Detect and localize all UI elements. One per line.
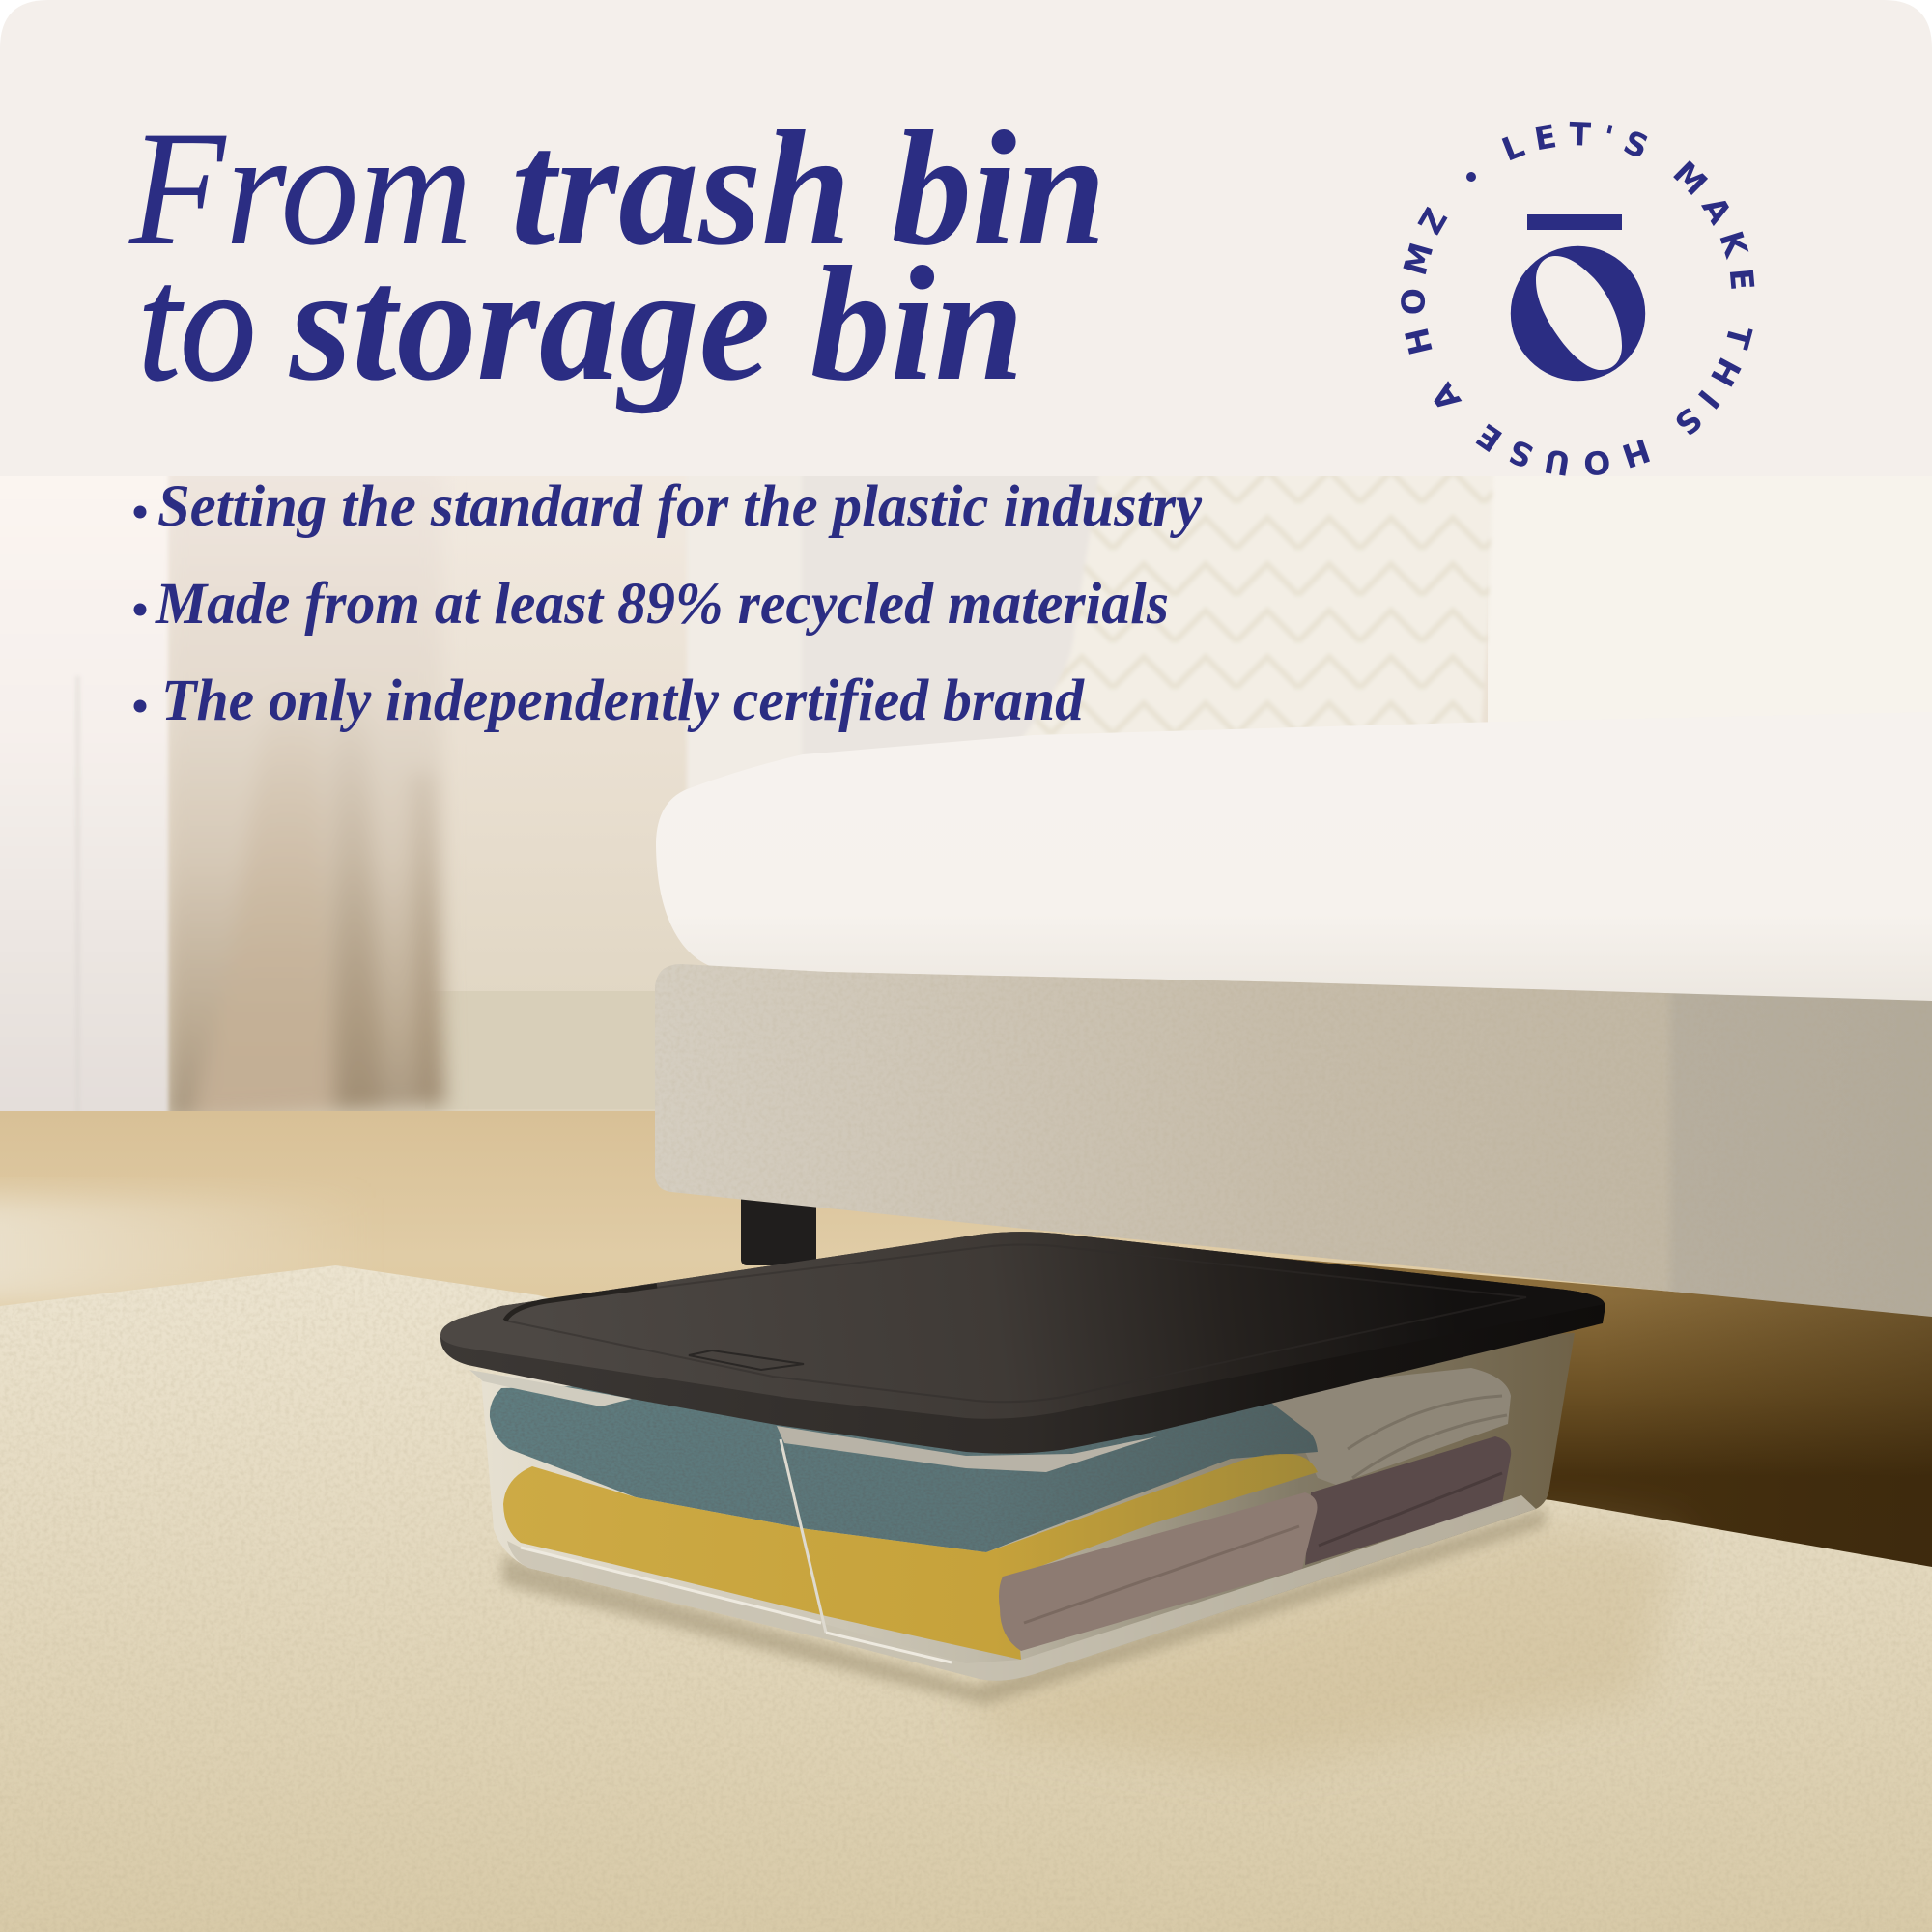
shaded floor under bed [1256, 1256, 1932, 1575]
headline: storage bin [289, 233, 1024, 414]
beige curtain [166, 680, 456, 1111]
baseboard [448, 991, 655, 1057]
logo letter o with macron [1511, 214, 1645, 381]
headline: to [138, 233, 256, 414]
left corner rim clip [469, 1370, 632, 1406]
chevron pillow [1017, 469, 1493, 744]
right corner rim clip [777, 1426, 1157, 1472]
teal sweater [490, 1381, 1318, 1552]
white sheer curtain [0, 464, 168, 1125]
lid rim [440, 1232, 1605, 1454]
folded back plum towel [1305, 1436, 1511, 1565]
front corner edge line [781, 1439, 826, 1633]
storage bin [440, 1232, 1605, 1681]
pale right wall [1488, 476, 1932, 737]
upholstered bed base [655, 964, 1932, 1317]
bed headboard cushion [686, 549, 1070, 789]
wood floor [0, 1111, 1681, 1306]
knit texture [490, 1381, 1318, 1552]
folded back beige towel [1256, 1368, 1511, 1485]
headline: From [128, 98, 472, 279]
frosted bin floor [507, 1495, 1536, 1681]
bullet list [133, 474, 1203, 733]
back wall [166, 476, 1488, 1111]
mustard sweater [503, 1454, 1318, 1660]
header band [0, 0, 1932, 476]
headline [128, 98, 1106, 414]
tan shading on carpet right of bin [966, 1517, 1681, 1768]
lid top surface [440, 1232, 1605, 1419]
mauve folded towel [999, 1492, 1318, 1651]
bin contact shadow [502, 1507, 1546, 1705]
circular logo badge [1401, 122, 1754, 476]
embossed brand plate [689, 1350, 804, 1370]
bullet two: Made from at least 89% recycled materials [155, 572, 1169, 637]
carpet rug [0, 1265, 1932, 1932]
bullet one: Setting the standard for the plastic industry [157, 474, 1203, 539]
lid inner recess [505, 1244, 1526, 1402]
lid recess dark crescent [505, 1286, 657, 1321]
mattress [656, 712, 1932, 1001]
bed leg [741, 1200, 816, 1265]
curved slogan text: LET'S MAKE THIS HOUSE A HOMZ [1401, 122, 1754, 476]
bullet three: The only independently certified brand [161, 668, 1085, 733]
soft floor glow beyond rug [0, 1185, 288, 1306]
clear bin body [481, 1333, 1575, 1681]
headline: trash bin [511, 98, 1106, 279]
base edge lines [521, 1548, 952, 1662]
